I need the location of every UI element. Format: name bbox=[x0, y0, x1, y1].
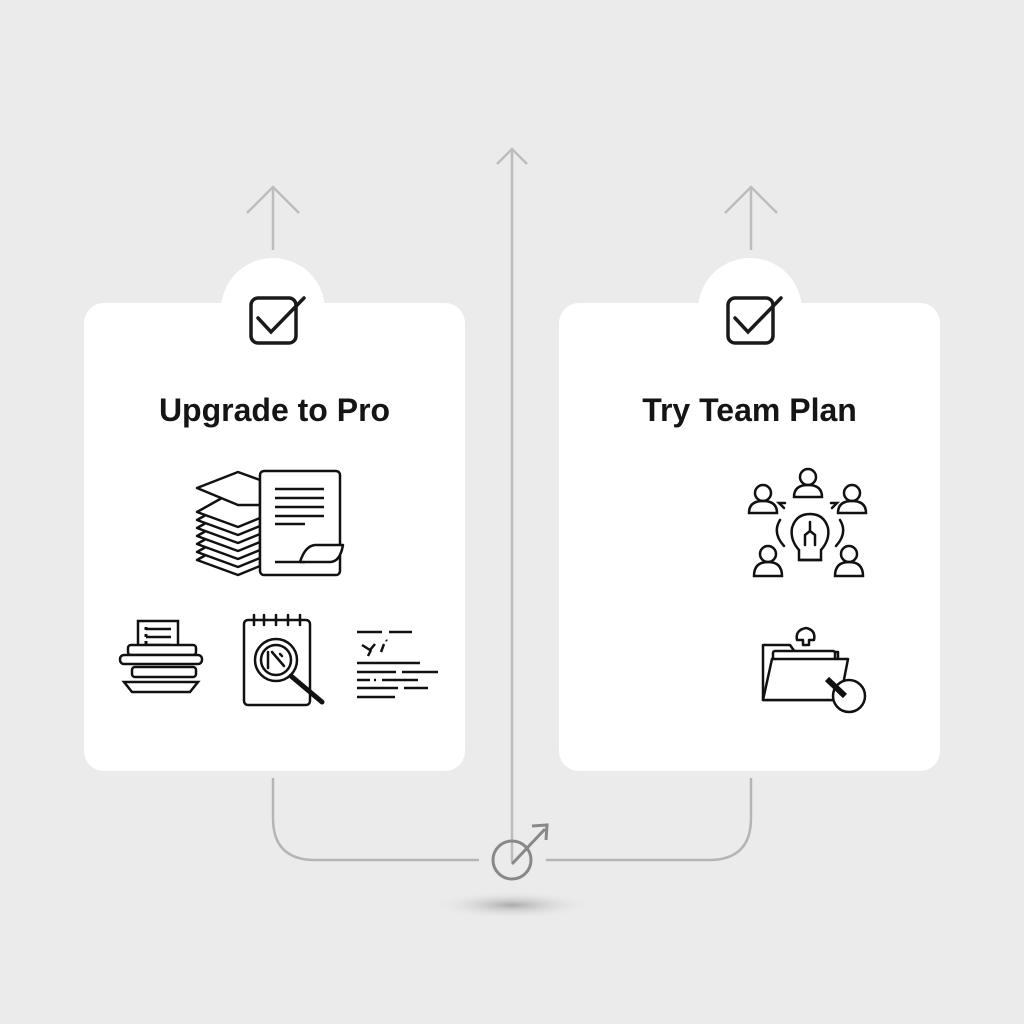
arrow: left up bbox=[247, 187, 299, 250]
icon: folder bbox=[763, 628, 865, 712]
heading: try team plan: Try Team Plan bbox=[642, 392, 857, 428]
panel tab: left bbox=[221, 258, 325, 362]
panel: upgrade to pro bbox=[84, 303, 465, 771]
icon: printer bbox=[120, 621, 202, 692]
shadow bbox=[432, 891, 592, 919]
icon: text lines bbox=[357, 632, 438, 697]
connector lines bbox=[273, 778, 751, 860]
panel: try team plan bbox=[559, 303, 940, 771]
icon: team lightbulb bbox=[749, 469, 866, 576]
panel tab: right bbox=[698, 258, 802, 362]
icon: paper stack and document bbox=[197, 471, 343, 575]
icon: checkbox left bbox=[251, 298, 304, 343]
icon: checkbox right bbox=[728, 298, 781, 343]
icon: connector circle arrow bbox=[493, 825, 547, 879]
arrow: center vertical bbox=[497, 149, 527, 862]
icon: notepad magnifier bbox=[244, 615, 322, 705]
heading: upgrade to pro: Upgrade to Pro bbox=[159, 392, 390, 428]
arrow: right up bbox=[725, 187, 777, 250]
